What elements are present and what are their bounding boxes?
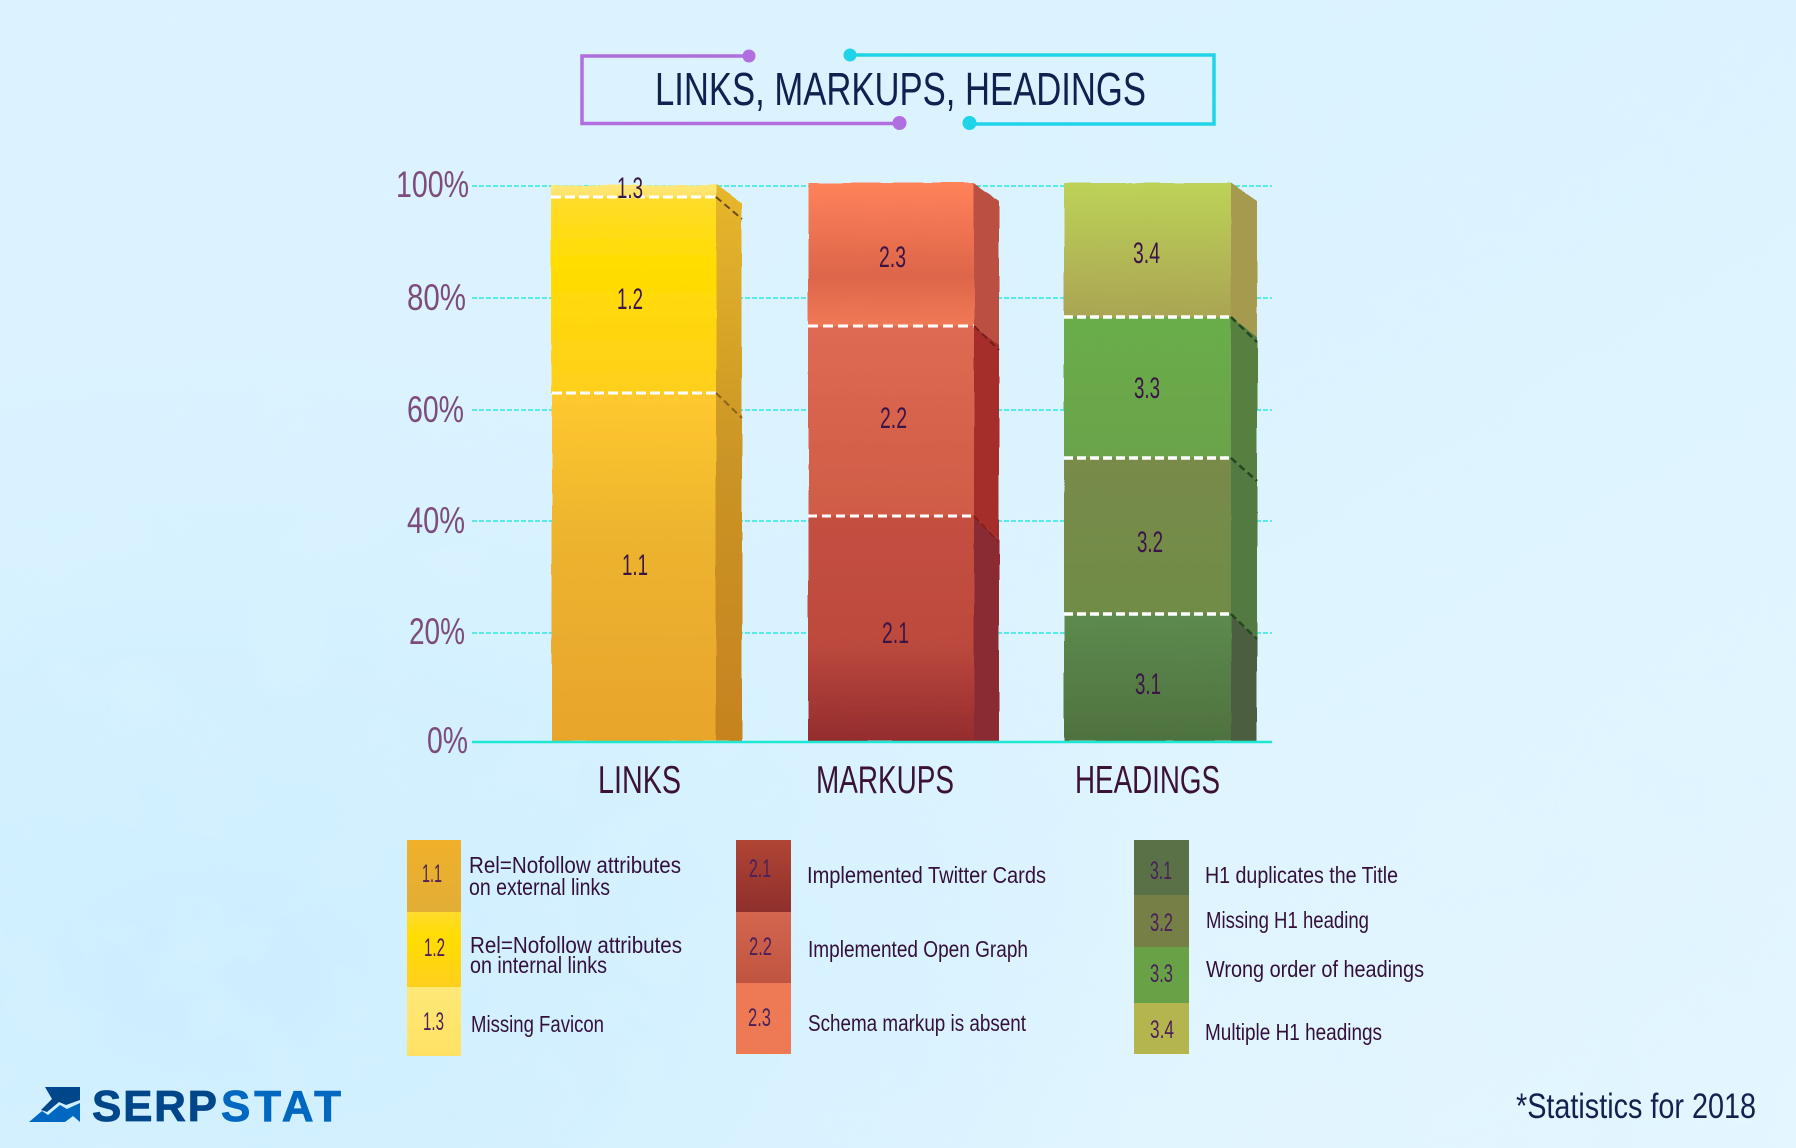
bar value labels: 1.2 xyxy=(617,283,643,316)
swatches xyxy=(1134,840,1189,1054)
y axis labels: 20% xyxy=(409,611,465,652)
legend: headings: 3.4 xyxy=(1150,1016,1174,1044)
legend: links: Rel=Nofollow attributes xyxy=(469,852,681,878)
cyan title bracket xyxy=(844,48,1214,130)
legend: links: on internal links xyxy=(470,952,607,978)
legend: links: on external links xyxy=(469,874,610,900)
swatches xyxy=(736,840,791,1054)
purple title bracket xyxy=(582,50,906,130)
y axis labels: 0% xyxy=(427,720,468,761)
logo: serpstat xyxy=(29,1082,341,1131)
bar value labels: 3.4 xyxy=(1133,237,1160,270)
legend: markups: Implemented Twitter Cards xyxy=(807,862,1046,888)
bar value labels: 3.1 xyxy=(1135,668,1161,701)
legend: links: Missing Favicon xyxy=(471,1011,604,1037)
gridlines xyxy=(472,186,1272,633)
wordmark xyxy=(92,1082,341,1131)
y axis labels: 100% xyxy=(396,164,469,205)
y axis labels: 80% xyxy=(407,277,466,318)
title: LINKS, MARKUPS, HEADINGS xyxy=(655,63,1146,115)
legend: headings: H1 duplicates the Title xyxy=(1205,862,1398,888)
legend: headings: Multiple H1 headings xyxy=(1205,1019,1382,1045)
stacked bar chart xyxy=(396,164,1272,802)
legend: headings: Missing H1 heading xyxy=(1206,907,1369,933)
legend: markups: Implemented Open Graph xyxy=(808,936,1028,962)
legend: headings: 3.2 xyxy=(1150,909,1173,937)
icon: rising chart arrow xyxy=(29,1087,80,1122)
bar value labels: 1.3 xyxy=(617,172,643,205)
legend: links: Rel=Nofollow attributes xyxy=(470,932,682,958)
bar: headings xyxy=(1064,183,1257,741)
legend: headings: 3.3 xyxy=(1150,960,1173,988)
bar: markups xyxy=(808,183,999,741)
category labels: LINKS xyxy=(598,759,681,802)
category labels: HEADINGS xyxy=(1075,759,1220,802)
bar: links xyxy=(551,172,742,741)
bar value labels: 3.3 xyxy=(1134,372,1160,405)
legend: links: 1.3 xyxy=(423,1008,444,1036)
bar value labels: 2.2 xyxy=(880,402,907,435)
legend: markups: 2.2 xyxy=(749,933,772,961)
category labels: MARKUPS xyxy=(816,759,954,802)
title block xyxy=(582,48,1214,130)
legend: headings xyxy=(1134,840,1424,1054)
legend: links: 1.2 xyxy=(424,934,445,962)
bar value labels: 2.3 xyxy=(879,241,906,274)
bar value labels: 3.2 xyxy=(1137,526,1163,559)
legend: headings: Wrong order of headings xyxy=(1206,956,1424,982)
baseline xyxy=(472,741,1272,743)
swatches xyxy=(407,840,461,1056)
legend: markups: Schema markup is absent xyxy=(808,1010,1026,1036)
bar value labels xyxy=(1133,237,1163,701)
legend: links: 1.1 xyxy=(422,860,442,888)
legend: markups: 2.1 xyxy=(749,855,771,883)
wordmark: SERP xyxy=(92,1082,217,1131)
category labels xyxy=(598,759,1220,802)
y axis labels: 60% xyxy=(407,389,464,430)
legend: links xyxy=(407,840,682,1056)
legend: markups: 2.3 xyxy=(748,1004,771,1032)
y axis labels: 40% xyxy=(407,500,465,541)
bar value labels xyxy=(617,172,648,582)
y axis labels xyxy=(396,164,469,761)
legend: headings: 3.1 xyxy=(1150,857,1172,885)
bar value labels xyxy=(879,241,909,650)
legend: markups xyxy=(736,840,1046,1054)
bar value labels: 1.1 xyxy=(622,549,648,582)
bar value labels: 2.1 xyxy=(882,617,909,650)
wordmark: STAT xyxy=(221,1082,341,1131)
